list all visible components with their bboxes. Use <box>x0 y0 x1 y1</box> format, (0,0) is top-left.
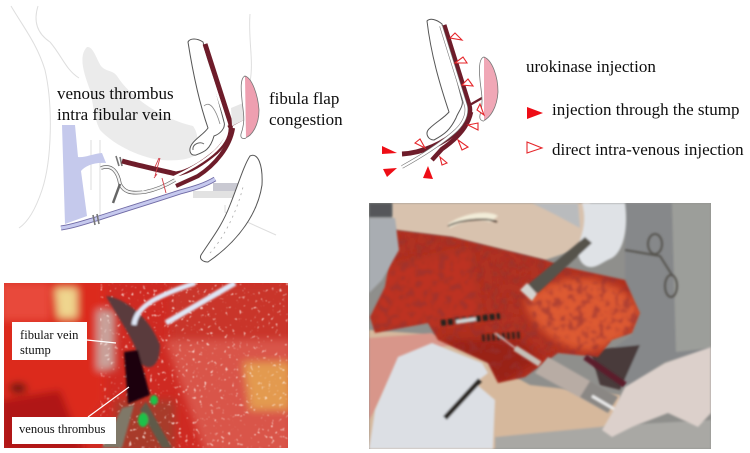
right gloved hand <box>602 347 711 437</box>
forceps at hand <box>445 380 480 418</box>
callout: venous thrombus: venous thrombus <box>19 422 106 436</box>
teeth <box>448 213 498 228</box>
label: intra fibular vein: intra fibular vein <box>57 105 172 124</box>
panel: photo of intra-venous urokinase injection <box>369 203 711 449</box>
label: venous thrombus: venous thrombus <box>57 84 174 103</box>
congested skin paddle <box>242 76 259 138</box>
syringe barrel <box>535 356 590 398</box>
lower left gloved hand <box>369 343 495 449</box>
drapes <box>618 205 690 383</box>
retractor <box>525 237 592 293</box>
label: congestion: congestion <box>269 110 343 129</box>
mandible silhouette <box>82 47 198 160</box>
panel: urokinase injection diagram <box>382 19 744 179</box>
gloved fingers top <box>578 203 626 267</box>
scissors <box>625 234 677 297</box>
fibula bone <box>188 39 224 155</box>
green clips <box>150 395 158 405</box>
filled red arrowheads <box>382 107 543 179</box>
pedicle to skin paddle <box>468 98 482 106</box>
thrombosed vein <box>122 44 230 174</box>
congested skin paddle <box>480 57 498 121</box>
forceps <box>102 405 134 448</box>
pale artery <box>142 44 227 190</box>
venous thrombus <box>124 350 150 404</box>
pedicle to skin paddle <box>228 118 245 127</box>
jugular vein <box>62 125 106 224</box>
pale artery <box>402 26 466 167</box>
fibula bone <box>427 19 462 140</box>
label: urokinase injection: urokinase injection <box>526 57 656 76</box>
thrombosed veins <box>402 25 470 154</box>
panel: photo of fibular vein stump <box>0 280 292 453</box>
artery loop <box>101 167 175 193</box>
panel: anatomy diagram of venous thrombus <box>11 6 343 262</box>
label: fibula flap: fibula flap <box>269 89 339 108</box>
callout: venous thrombus <box>12 387 129 444</box>
hollow red arrowheads <box>415 33 542 165</box>
callout: fibular vein stump: fibular vein <box>20 328 79 342</box>
lower vein to neck <box>61 179 215 228</box>
label: injection through the stump: injection through the stump <box>552 100 739 119</box>
dark vein <box>106 296 160 367</box>
lower skin paddle <box>200 155 262 262</box>
label: direct intra-venous injection: direct intra-venous injection <box>552 140 744 159</box>
vein clamp rings <box>93 214 99 225</box>
callout: fibular vein stump: stump <box>20 343 51 357</box>
dark vessels near syringe <box>585 357 625 385</box>
callout: fibular vein stump <box>12 322 116 360</box>
plate <box>441 316 500 323</box>
blue vessel loops <box>134 283 195 325</box>
neck and face outline <box>11 6 276 235</box>
open wound <box>369 223 649 388</box>
skin <box>392 203 590 260</box>
ligature marks <box>154 158 166 193</box>
skin paddle leg <box>213 183 240 191</box>
